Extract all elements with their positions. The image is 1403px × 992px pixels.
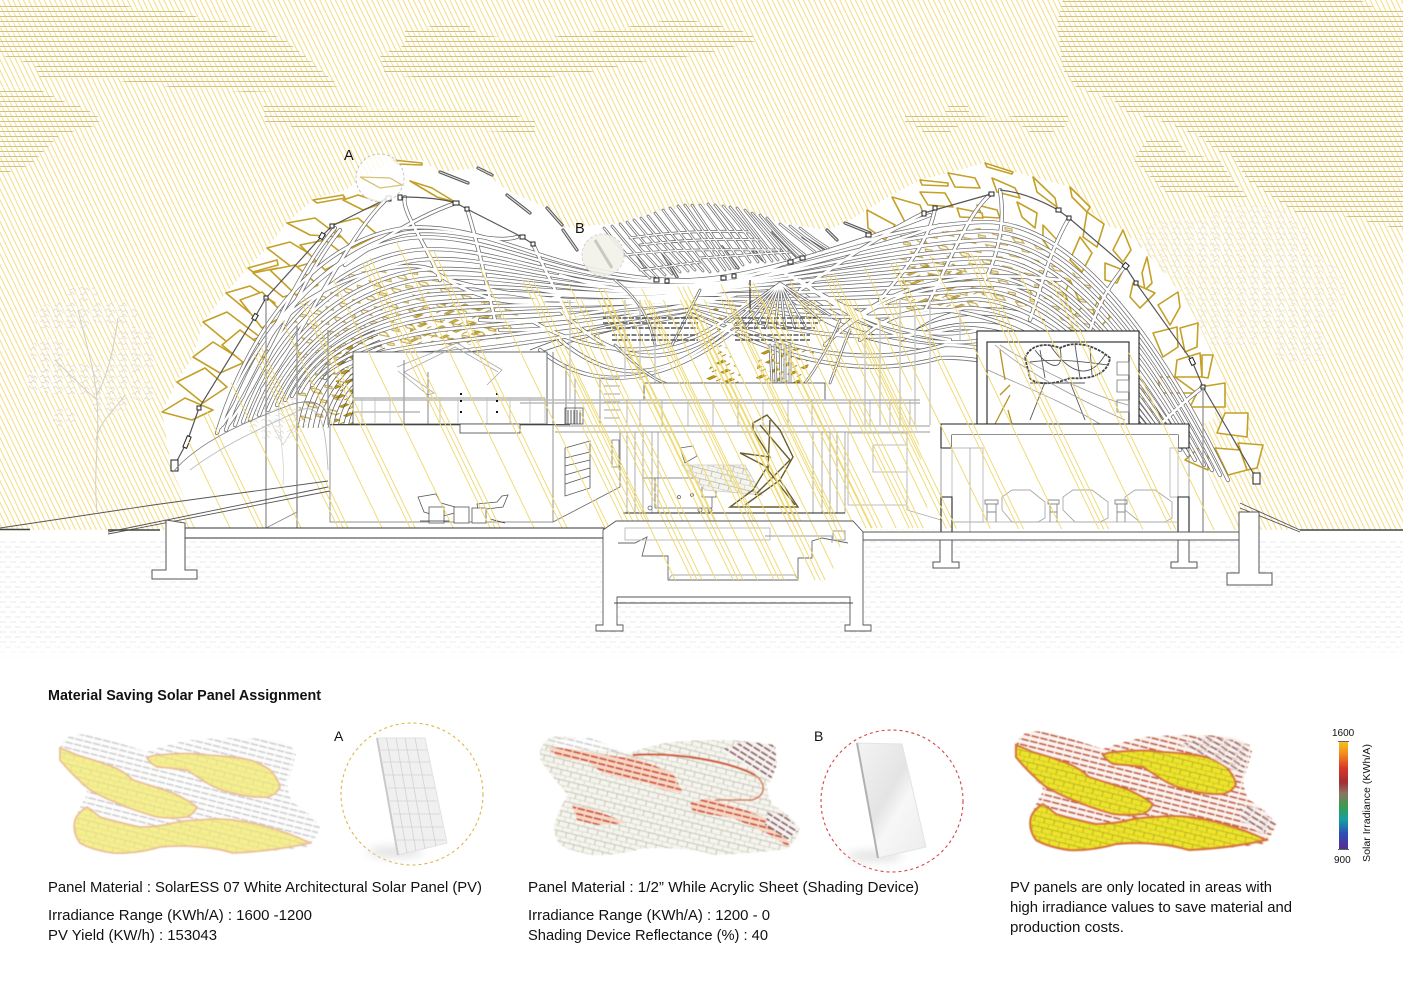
tree: left outline [25,285,158,512]
caption: summary note [1010,880,1292,936]
interior tree [243,363,307,485]
sky and sunlight hatch field [0,0,1403,530]
rays in the pit [640,522,848,580]
roof label A: A [344,148,354,164]
legend: solar irradiance colour bar: 1600 [1332,728,1355,739]
panel: combined irradiance map [1016,731,1276,850]
legend: solar irradiance colour bar [1332,728,1373,866]
magnifier circle A on roof [356,154,404,202]
heading: Material Saving Solar Panel Assignment [48,688,321,704]
truss bars at centre of roof [603,318,820,340]
caption: PV panel: Panel Material : SolarESS 07 White Architectural Solar Panel (PV) [48,880,482,896]
sunken central pit [596,521,871,631]
legend: solar irradiance colour bar: 900 [1334,855,1351,866]
floor slab and footings [152,512,1272,585]
dark shading device slits [440,168,870,277]
panel: acrylic sheet B in circle [821,730,963,872]
tree: right faint outline [1135,205,1345,365]
chairs and stools in right room [985,490,1172,522]
ramps and ground strips [0,402,1403,534]
magnifier circle B on roof [582,234,624,276]
building section: central hall [520,383,941,520]
caption: shading device: Irradiance Range (KWh/A) : 1200 - 0 [528,908,770,924]
caption: summary note: production costs. [1010,920,1124,936]
caption: shading device: Panel Material : 1/2” While Acrylic Sheet (Shading Device) [528,880,919,896]
lounge chairs [418,494,508,523]
shadow area cleared under the roof [162,160,1233,530]
building section: left volume [330,343,620,522]
left panels [162,160,455,420]
vertical posts [266,280,1203,533]
caption: PV panel: PV Yield (KW/h) : 153043 [48,928,217,944]
caption: PV panel [48,880,482,944]
panel: solar panel A in circle [341,723,483,865]
label A: A [334,728,344,744]
cloud hatching [0,0,1403,230]
right panels [867,163,1263,475]
truss chord and nodes [171,190,1260,484]
label B: B [814,728,823,744]
table and kitchen unit [642,446,762,512]
building section: right volume [941,331,1189,532]
sculptural chair [730,415,798,507]
left footing [152,520,197,579]
sparse light rays through the interior [172,240,1233,580]
right footings [933,540,1197,568]
roof ribs: white members with grey outline [217,190,1228,480]
panel: PV assignment map [60,734,320,853]
caption: summary note: PV panels are only located in areas with [1010,880,1272,896]
large right footing [1227,512,1272,585]
roof solar panels: outer gold frames [162,160,1263,475]
gold inner panel rows [290,225,1170,425]
caption: shading device: Shading Device Reflectance (%) : 40 [528,928,768,944]
thin arc bundles beside rooms [298,290,1175,445]
legend: solar irradiance colour bar: Solar Irradiance (KWh/A) [1361,744,1373,862]
roof label B: B [575,221,585,237]
caption: shading device [528,880,919,944]
panel: shading assignment map [540,736,800,855]
left slab [185,528,604,538]
right slab [863,532,1240,540]
caption: PV panel: Irradiance Range (KWh/A) : 1600 -1200 [48,908,312,924]
ground hatch [0,540,1403,662]
caption: summary note: high irradiance values to save material and [1010,900,1292,916]
